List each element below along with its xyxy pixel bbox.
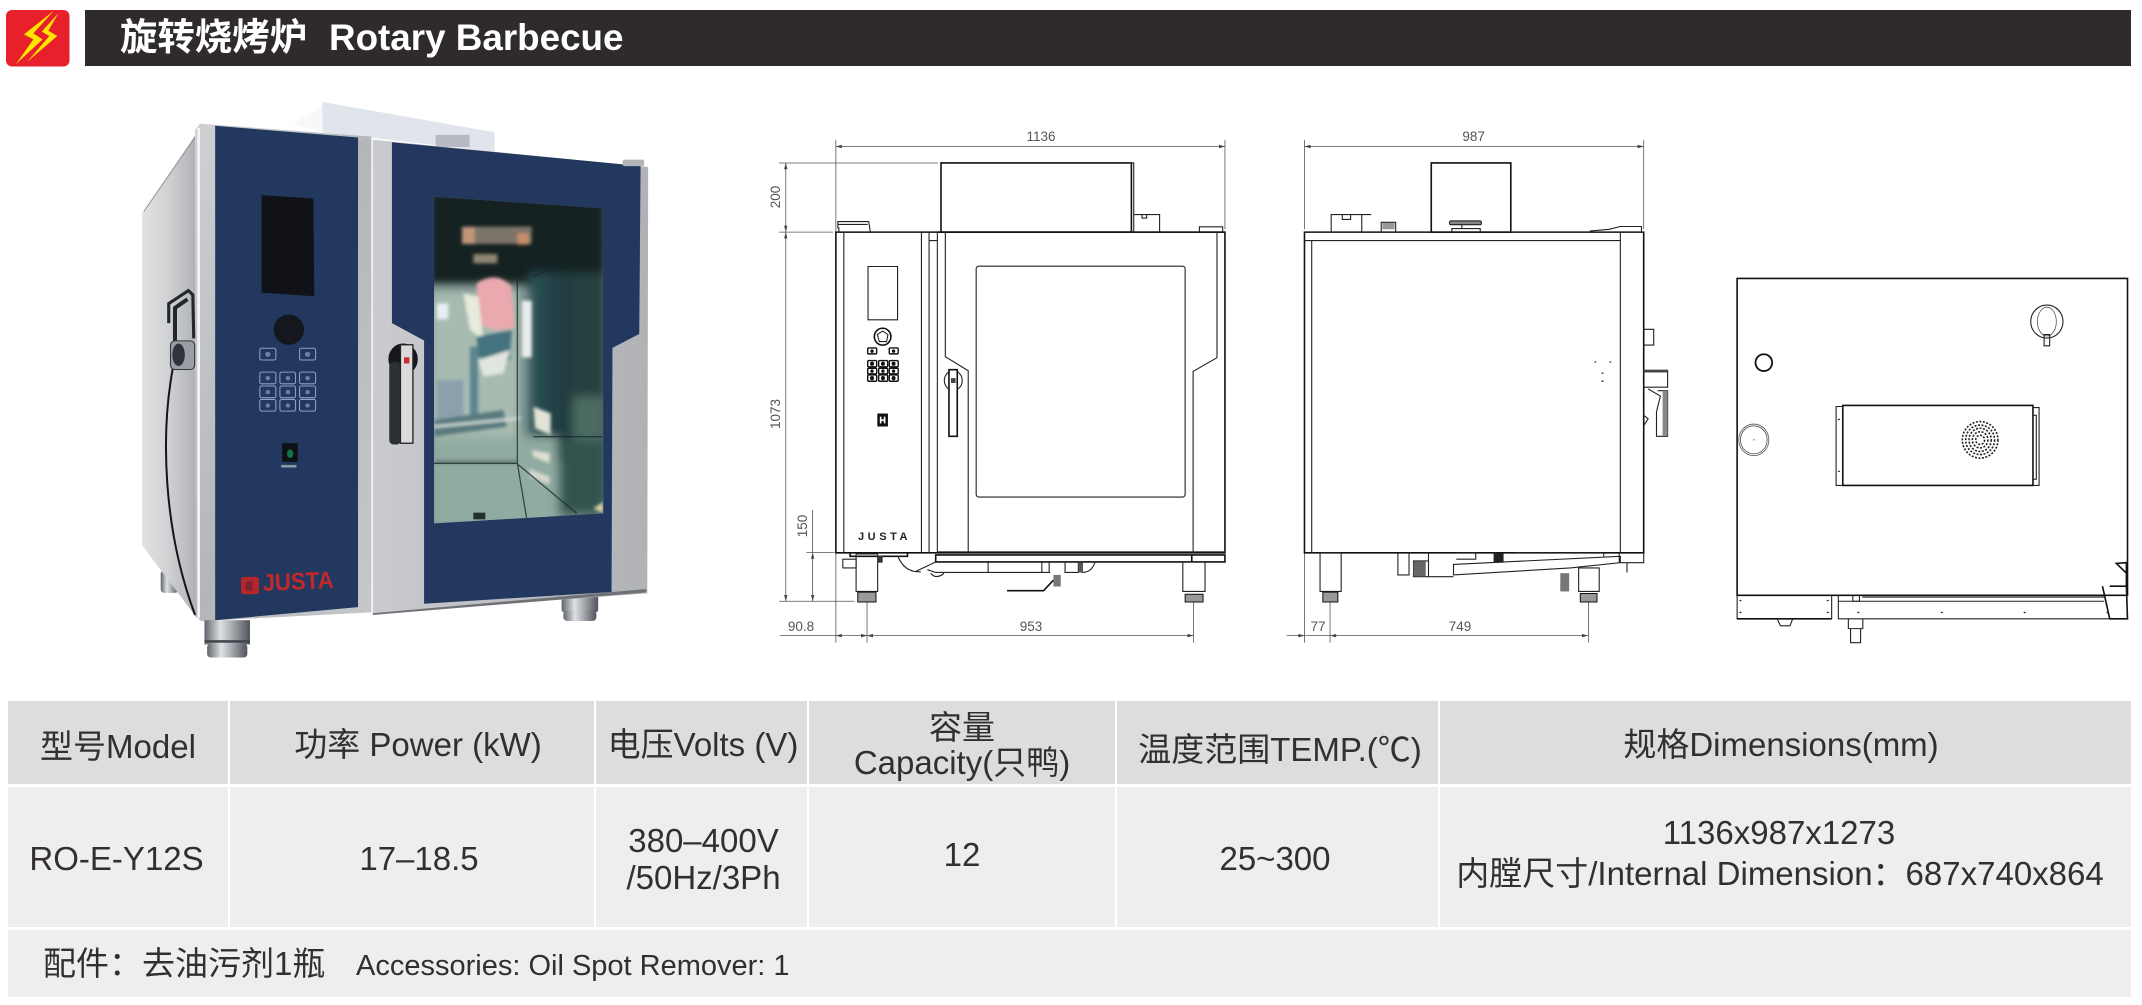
door handle xyxy=(944,370,962,436)
oven top right hinge xyxy=(623,160,644,166)
side dimension labels: 749 xyxy=(1449,619,1471,634)
oven door blue panel xyxy=(392,142,641,604)
oven keypad xyxy=(260,348,316,411)
oven power switch xyxy=(281,443,298,468)
dimension labels: 953 xyxy=(1020,619,1042,634)
control panel details xyxy=(868,267,898,427)
side body xyxy=(1304,232,1644,553)
drawing logo text: JUSTA xyxy=(858,531,908,543)
exhaust box plan xyxy=(1836,405,2039,485)
oven hose and spray gun xyxy=(166,291,195,615)
oven door handle xyxy=(388,343,418,445)
oven window xyxy=(427,190,607,527)
value: temperature: 25~300 xyxy=(1219,840,1331,877)
side dimension labels xyxy=(1310,129,1485,634)
header: capacity: Capacity(只鸭) xyxy=(854,744,1070,781)
technical drawing: side view xyxy=(1287,129,1668,643)
body outline xyxy=(836,232,1225,553)
dimension labels: 1136 xyxy=(1026,129,1056,144)
title banner: 旋转烧烤炉 xyxy=(120,16,307,58)
value: volts: 380–400V xyxy=(628,822,779,859)
top view outline xyxy=(1737,278,2128,595)
door outline xyxy=(945,232,1217,553)
header: dimensions: 规格Dimensions(mm) xyxy=(1623,726,1939,763)
technical drawing: front view xyxy=(768,129,1225,643)
table row backgrounds xyxy=(8,787,2131,997)
title banner: Rotary Barbecue xyxy=(329,17,623,58)
icon: red lightning badge xyxy=(6,10,70,66)
exhaust box xyxy=(941,163,1160,232)
oven rear feet xyxy=(161,570,598,621)
oven side panel xyxy=(142,134,201,618)
dimension labels: 200 xyxy=(768,186,783,208)
header: temperature: 温度范围TEMP.(℃) xyxy=(1138,731,1422,768)
oven control panel xyxy=(215,126,358,620)
side dimension labels: 77 xyxy=(1310,619,1326,634)
value: volts xyxy=(626,822,781,896)
value: dimensions xyxy=(1456,814,2104,892)
oven bottom trim xyxy=(373,589,646,615)
side top parts xyxy=(1331,163,1641,232)
value: capacity: 12 xyxy=(944,836,980,873)
accessories row: 配件：去油污剂1瓶 xyxy=(43,945,325,982)
value: volts: /50Hz/3Ph xyxy=(626,859,781,896)
dimension labels: 150 xyxy=(795,515,810,537)
header: capacity: 容量 xyxy=(929,709,995,746)
value: dimensions: 1136x987x1273 xyxy=(1663,814,1895,851)
door window xyxy=(976,266,1185,497)
side dimension labels: 987 xyxy=(1462,129,1485,144)
oven knob xyxy=(274,314,304,345)
accessories row: Accessories: Oil Spot Remover: 1 xyxy=(356,950,790,982)
oven logo mark xyxy=(241,577,259,594)
value: power: 17–18.5 xyxy=(359,840,479,877)
technical drawing: top view xyxy=(1737,278,2128,643)
side handle xyxy=(1594,329,1668,436)
dimension labels: 90.8 xyxy=(788,619,814,634)
dimension labels xyxy=(768,129,1056,634)
oven control column frame xyxy=(195,124,371,621)
oven door frame xyxy=(373,140,648,614)
header: power: 功率 Power (kW) xyxy=(294,726,542,763)
oven front foot xyxy=(204,620,250,657)
table header backgrounds xyxy=(8,701,2131,784)
header: model: 型号Model xyxy=(40,728,196,765)
base and feet xyxy=(843,553,1225,602)
fan grille xyxy=(1962,422,1998,458)
oven screen xyxy=(262,195,314,296)
header: capacity xyxy=(854,709,1070,781)
side dimension lines xyxy=(1287,140,1644,643)
header: volts: 电压Volts (V) xyxy=(608,726,798,763)
accessories row xyxy=(43,945,790,982)
oven brand text: JUSTA xyxy=(262,567,334,597)
oven top vent box xyxy=(292,102,495,152)
specification table xyxy=(8,701,2131,997)
base rails and hinge xyxy=(1737,563,2128,643)
value: model: RO-E-Y12S xyxy=(29,840,204,877)
ports xyxy=(1739,305,2063,456)
hinges on top xyxy=(838,222,1223,232)
product image: rotary oven xyxy=(142,102,648,657)
title banner xyxy=(85,10,2131,66)
side base and pipes xyxy=(1320,553,1644,602)
value: dimensions: 内膛尺寸/Internal Dimension：687x740x864 xyxy=(1456,855,2104,892)
dimension lines xyxy=(779,140,1225,643)
dimension labels: 1073 xyxy=(768,399,783,429)
